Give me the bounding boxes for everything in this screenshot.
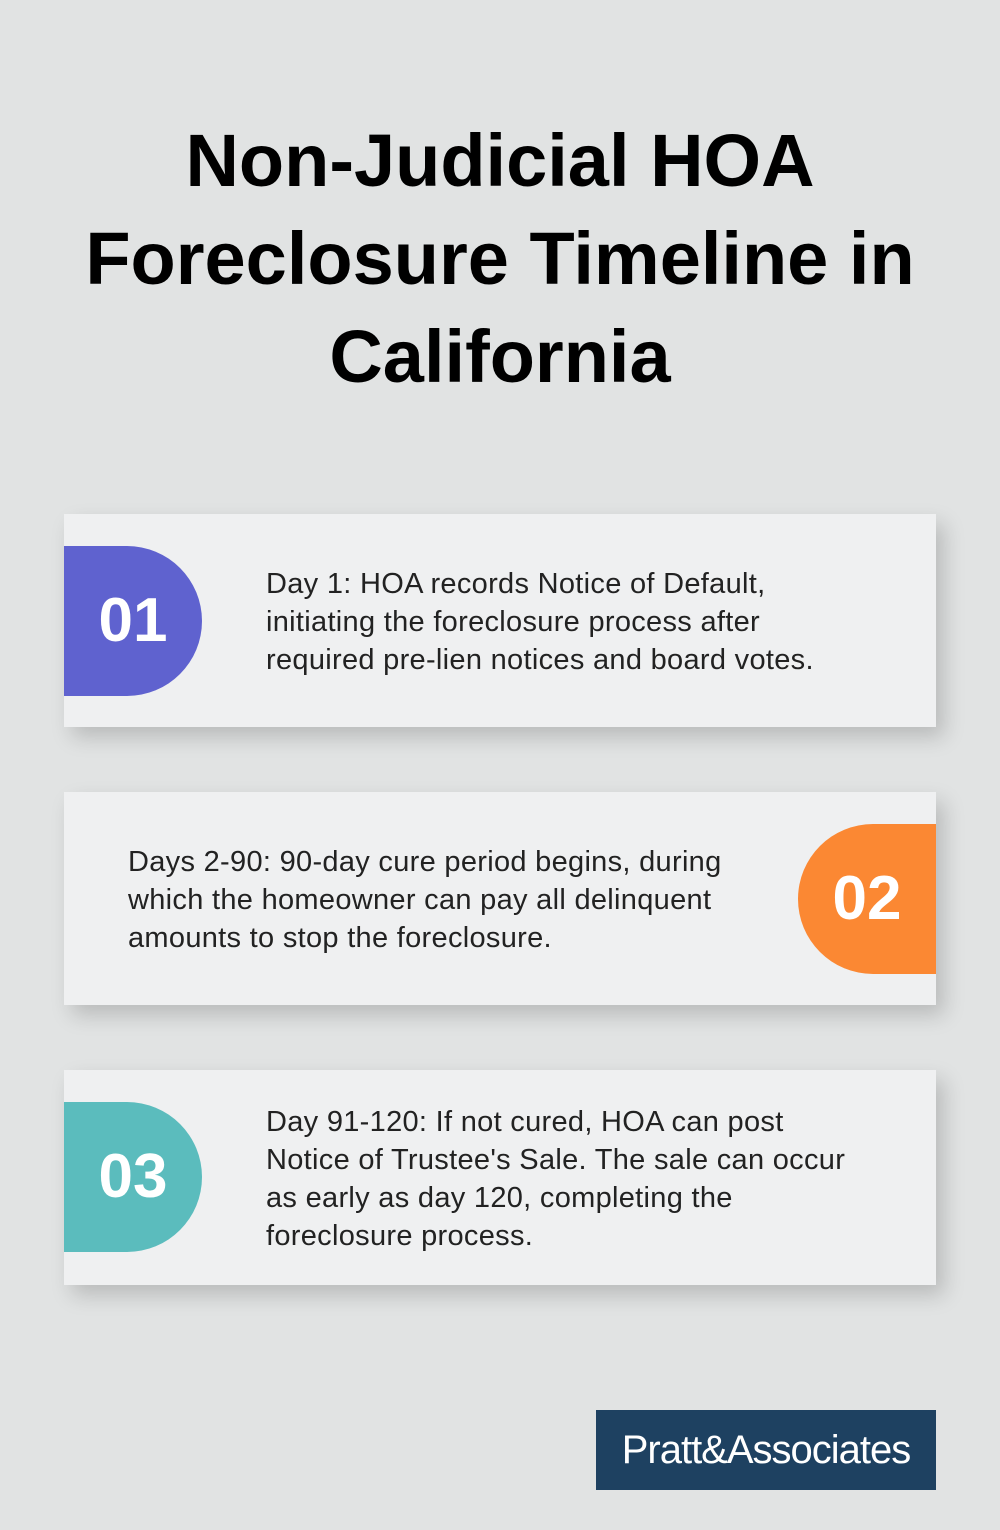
- text 3: foreclosure process.: [266, 1220, 533, 1252]
- logo: Pratt&Associates: [622, 1428, 910, 1472]
- text 2: Days 2-90: 90-day cure period begins, during: [128, 846, 722, 878]
- title: [85, 119, 915, 398]
- card 2: [64, 792, 936, 1005]
- text 1: [266, 568, 814, 676]
- card 3: [64, 1070, 936, 1285]
- text 3: Notice of Trustee's Sale. The sale can occur: [266, 1144, 845, 1176]
- badge 03: [64, 1102, 202, 1252]
- text 2: [128, 846, 722, 954]
- title: Foreclosure Timeline in: [85, 217, 915, 300]
- badge 01: 01: [99, 586, 167, 655]
- badge 03: 03: [99, 1142, 167, 1211]
- badge 01: [64, 546, 202, 696]
- text 2: which the homeowner can pay all delinquent: [128, 884, 711, 916]
- text 3: as early as day 120, completing the: [266, 1182, 733, 1214]
- text 3: [266, 1106, 845, 1252]
- title: California: [329, 315, 671, 398]
- text 1: initiating the foreclosure process after: [266, 606, 760, 638]
- text 1: Day 1: HOA records Notice of Default,: [266, 568, 765, 600]
- text 2: amounts to stop the foreclosure.: [128, 922, 552, 954]
- badge 02: 02: [833, 864, 901, 933]
- card 1: [64, 514, 936, 727]
- text 1: required pre-lien notices and board votes.: [266, 644, 814, 676]
- logo: [596, 1410, 936, 1490]
- badge 02: [798, 824, 936, 974]
- title: Non-Judicial HOA: [185, 119, 815, 202]
- text 3: Day 91-120: If not cured, HOA can post: [266, 1106, 784, 1138]
